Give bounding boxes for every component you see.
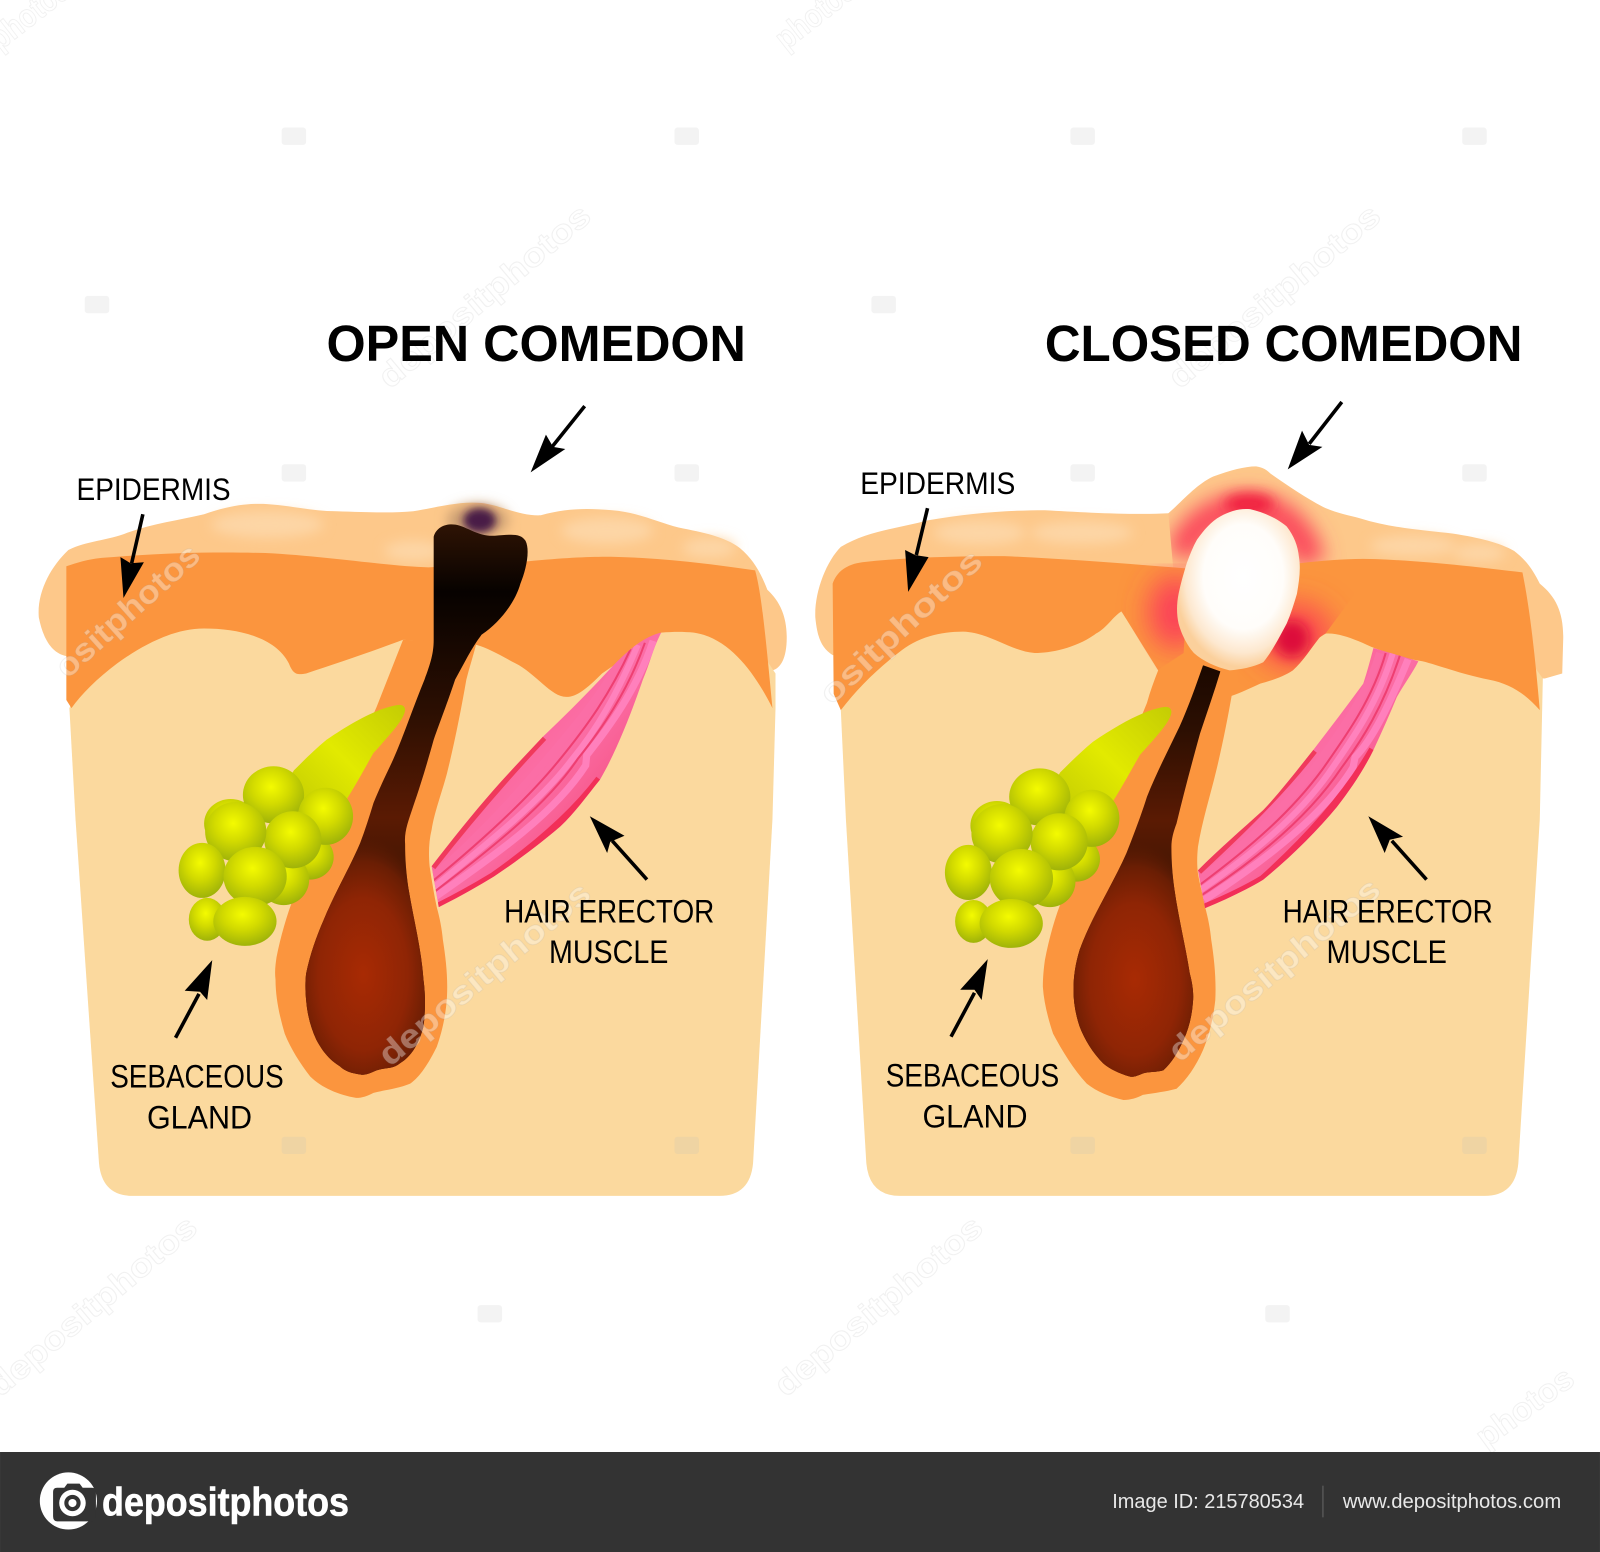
label: epidermis left: EPIDERMIS xyxy=(77,471,231,507)
label: hair erector muscle left: HAIR ERECTOR xyxy=(504,892,714,929)
epidermis highlights xyxy=(934,520,1505,562)
label: hair erector muscle left: MUSCLE xyxy=(549,933,668,970)
footer brand name: depositphotos xyxy=(102,1480,349,1524)
footer image id: Image ID: 215780534 xyxy=(1112,1491,1304,1513)
watermark: diagonal logos: depositphotos xyxy=(371,874,598,1073)
arrow: gland right xyxy=(951,959,988,1037)
label: sebaceous gland left: GLAND xyxy=(147,1099,252,1136)
arrow: epidermis left xyxy=(120,514,144,598)
epidermis outer layer with bump xyxy=(815,466,1563,679)
hair erector muscle xyxy=(1198,648,1418,908)
arrow: muscle left xyxy=(590,816,647,880)
title: closed comedon: CLOSED COMEDON xyxy=(1045,315,1522,372)
footer website: www.depositphotos.com xyxy=(1342,1491,1561,1513)
label: sebaceous gland right: SEBACEOUS xyxy=(886,1057,1059,1094)
blackhead oxidised tip xyxy=(463,508,496,533)
blackhead plug halo xyxy=(447,504,508,537)
label: hair erector muscle right xyxy=(1283,892,1493,970)
watermark: diagonal logos: ositphotos xyxy=(811,542,989,711)
hypodermis tissue xyxy=(841,612,1543,1196)
label: sebaceous gland left xyxy=(110,1058,284,1136)
hair follicle sheath xyxy=(1043,563,1325,1100)
label: sebaceous gland left: SEBACEOUS xyxy=(110,1058,284,1095)
title: open comedon: OPEN COMEDON xyxy=(327,315,746,372)
hair shaft and bulb xyxy=(1074,665,1220,1077)
inflammation glow above pearl xyxy=(1182,494,1310,563)
arrow: muscle right xyxy=(1368,816,1427,880)
label: hair erector muscle right: MUSCLE xyxy=(1327,933,1447,970)
watermark: diagonal logos: photos xyxy=(1468,1359,1581,1455)
watermark: camera marks xyxy=(85,128,1487,1322)
epidermis outer layer xyxy=(39,503,787,670)
sebum pearl xyxy=(1177,509,1300,670)
label: hair erector muscle right: HAIR ERECTOR xyxy=(1283,892,1493,929)
hair shaft and bulb xyxy=(305,524,528,1075)
epidermis highlights xyxy=(211,511,736,561)
sebaceous gland xyxy=(945,707,1171,948)
label: epidermis right: EPIDERMIS xyxy=(860,465,1015,501)
watermark: diagonal logos: depositphotos xyxy=(371,196,598,395)
label: sebaceous gland right: GLAND xyxy=(922,1098,1028,1135)
hair erector muscle xyxy=(429,633,661,907)
label: hair erector muscle left xyxy=(504,892,714,970)
watermark: diagonal logos: ositphotos xyxy=(47,536,207,685)
sebaceous gland xyxy=(179,705,405,946)
arrow: gland left xyxy=(176,960,212,1038)
arrow: open comedon xyxy=(531,406,585,472)
hypodermis tissue xyxy=(69,612,776,1196)
watermark: diagonal logos: depositphotos xyxy=(1160,196,1387,395)
dermis orange layer xyxy=(833,556,1540,710)
footer bar xyxy=(0,1452,1600,1552)
inflammation glow right of pearl xyxy=(1255,602,1333,667)
icon: depositphotos camera logo xyxy=(40,1472,97,1530)
watermark: diagonal logos: depositphotos xyxy=(766,1208,990,1403)
panel: closed comedon xyxy=(815,466,1563,1196)
arrow: closed comedon xyxy=(1288,402,1342,469)
dermis orange layer xyxy=(66,553,772,708)
label: sebaceous gland right xyxy=(886,1057,1059,1135)
arrow: epidermis right xyxy=(905,508,929,592)
watermark: diagonal logos: depositphotos xyxy=(1160,870,1387,1069)
panel: open comedon xyxy=(39,503,787,1196)
inflammation glow left of pearl xyxy=(1149,575,1202,649)
hair follicle sheath xyxy=(275,640,477,1098)
